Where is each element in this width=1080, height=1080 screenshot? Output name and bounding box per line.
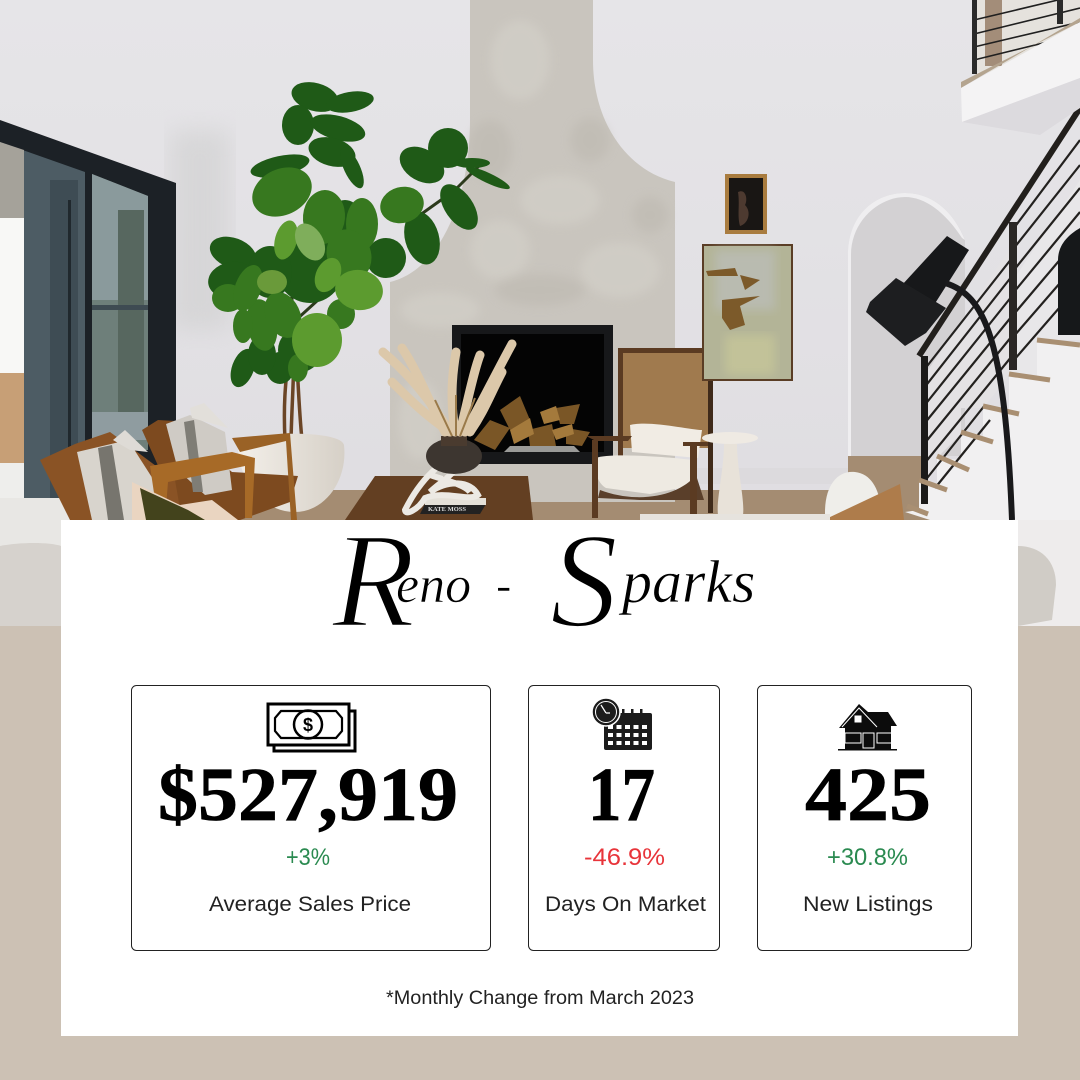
listings value: 425 xyxy=(805,753,931,837)
grey sofa right xyxy=(1018,546,1056,626)
coffee table with sculpture and books xyxy=(345,461,533,520)
days value: 17 xyxy=(588,753,655,837)
listings label: New Listings xyxy=(803,892,933,916)
photo: living room interior xyxy=(0,0,1080,626)
icon: house xyxy=(838,704,897,750)
window xyxy=(0,120,176,498)
abstract framed painting xyxy=(702,244,793,381)
marble side table xyxy=(702,432,758,515)
floor xyxy=(0,468,932,626)
upper balcony xyxy=(961,0,1080,135)
card: average sales price xyxy=(132,686,490,950)
lounge chairs with pillows xyxy=(40,403,298,520)
price value: $527,919 xyxy=(158,753,458,837)
coffee table with sculpture and books: KATE MOSS xyxy=(428,506,466,513)
days label: Days On Market xyxy=(545,892,706,916)
cane armchair xyxy=(586,348,713,518)
icon: money bills xyxy=(268,704,355,751)
card: new listings xyxy=(758,686,972,950)
fiddle leaf plant xyxy=(205,77,512,440)
wall xyxy=(0,0,1080,626)
grey sofa left xyxy=(0,543,61,626)
lower beige band xyxy=(0,626,1080,1080)
icon: money bills: $ xyxy=(303,715,313,735)
days change: -46.9% xyxy=(584,844,665,871)
vase with pampas grass xyxy=(383,344,512,474)
price change: +3% xyxy=(286,844,330,871)
title: S xyxy=(550,506,618,656)
title: eno xyxy=(396,557,471,614)
card: days on market xyxy=(528,686,720,950)
price label: Average Sales Price xyxy=(209,892,411,916)
floor lamp xyxy=(866,236,1012,520)
small dark portrait painting xyxy=(725,174,767,234)
title: - xyxy=(496,559,511,610)
footnote: *Monthly Change from March 2023 xyxy=(386,988,694,1009)
plaster fireplace chimney xyxy=(390,0,675,502)
title: parks xyxy=(618,549,755,615)
white content panel xyxy=(61,506,1018,1036)
listings change: +30.8% xyxy=(827,844,908,871)
staircase with railing and treads xyxy=(905,108,1080,626)
title: R xyxy=(331,506,415,656)
plant pot xyxy=(238,434,344,512)
sofa pillows xyxy=(640,472,904,520)
arched doorway xyxy=(848,193,965,490)
fireplace with logs xyxy=(452,325,613,464)
icon: calendar and clock xyxy=(592,698,652,750)
